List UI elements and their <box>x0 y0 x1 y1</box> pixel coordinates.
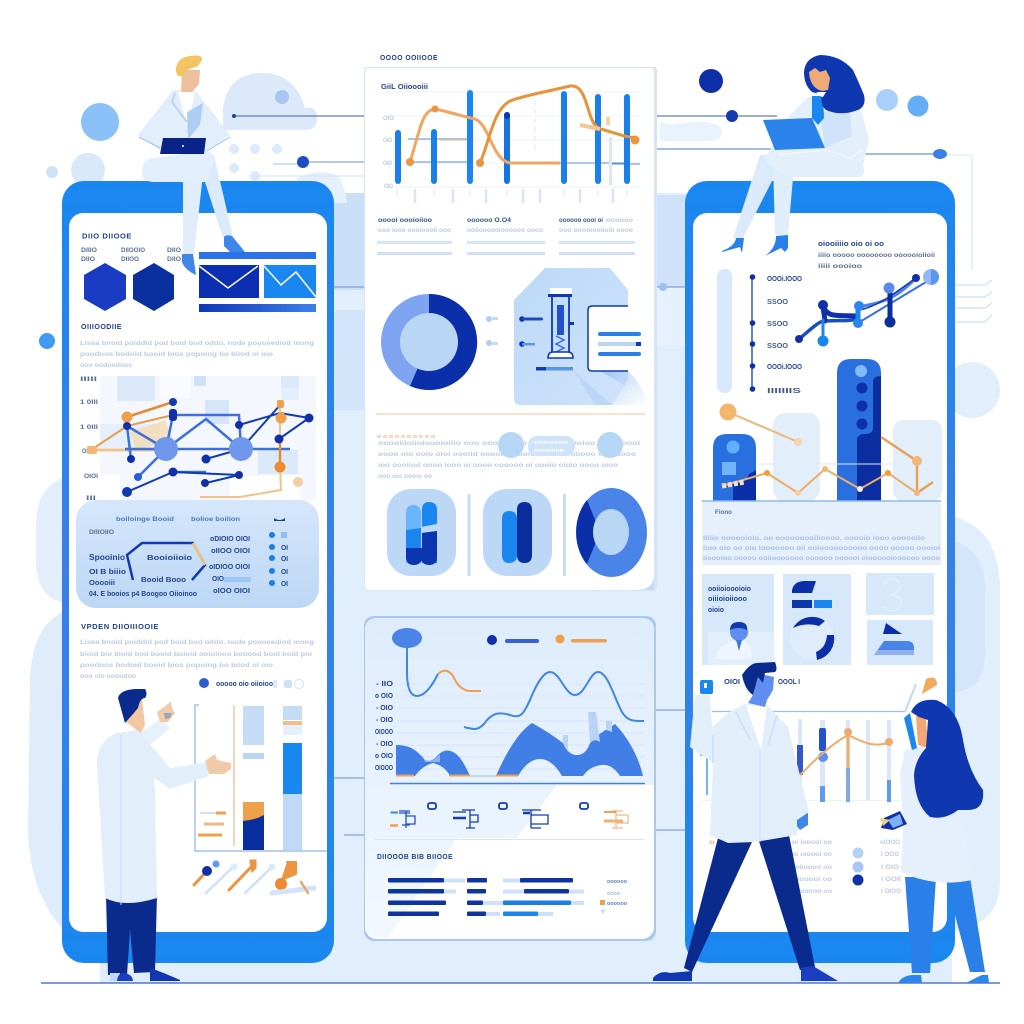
right heading text: iiiio ooooo oooooooo oooooioiioii <box>818 252 935 259</box>
lower left text: VPDEN DIIOIIIOOIE <box>81 624 159 631</box>
heatmap network chart: 1 0III <box>80 399 98 406</box>
left info panel: oIDIOO OIOI <box>209 564 250 571</box>
right paragraph: Iiiiio oooooioio. oo ooooooooiiioooo. ooooio iooo oooooiio <box>703 535 925 542</box>
center paragraph <box>377 432 640 480</box>
lower left bar chart <box>195 705 327 851</box>
lower right lists: oiioooo oo <box>795 864 832 871</box>
left heading: DIIIO <box>81 247 97 254</box>
lower right lists: oiOOO <box>880 839 900 846</box>
left info panel: oIOO OIOI <box>213 588 250 595</box>
lower left text: poodoos bodoid booid bios popoing bo biiod ol oio <box>80 662 273 669</box>
left heading: DIIO <box>167 256 181 263</box>
lower left text: ooo oio oooodoo <box>80 673 136 680</box>
axis list: SSOO <box>767 343 789 350</box>
line and area chart: o OIO <box>375 753 394 760</box>
bottom table: DIIOOOB BIB BIIOOE <box>377 854 453 861</box>
lower right chart <box>700 679 905 802</box>
left info panel: OIO <box>212 576 225 583</box>
left body text <box>80 324 314 369</box>
left heading: DIIO <box>167 247 181 254</box>
line and bar chart: OIO <box>383 160 392 167</box>
line and bar chart: OIO <box>384 183 393 190</box>
left heading: DIIOO <box>121 256 139 263</box>
person: woman right <box>880 677 989 983</box>
left info panel: OI B biiio <box>89 569 126 576</box>
right heading text <box>818 241 935 270</box>
pill cards and oval donut <box>387 488 647 577</box>
lower right lists: o <box>709 839 715 846</box>
axis list: OOOi.IOOO <box>767 364 802 371</box>
heatmap network chart: OI <box>82 448 88 455</box>
heatmap network chart <box>80 376 316 502</box>
right device <box>685 181 955 963</box>
left info panel: Booid Booo <box>141 577 186 584</box>
right paragraph: iioo oio oo oio iooooooo oii ooioooooooooo oooo ooooo oooioi <box>703 545 940 552</box>
center paragraph: ioo oooiiod oooo iooo oi oooo oooooo oi oooio oioio oooo oioo <box>378 462 618 469</box>
line and area chart: o OIO <box>375 693 394 700</box>
axis list: OOOi.IOOO <box>767 276 802 283</box>
bottom table: oooooo <box>607 879 628 885</box>
card: profile: oioio <box>708 607 724 614</box>
left info panel <box>76 500 319 608</box>
left info panel: 04. E booios p4 Boogoo Oiioinoo <box>89 591 197 598</box>
lower right chart: OIOI <box>724 679 740 686</box>
three stat columns <box>377 217 635 255</box>
card: numeral <box>866 573 934 615</box>
axis list: SSOO <box>767 299 789 306</box>
instrument panel <box>514 268 648 405</box>
small tree icons <box>390 803 628 828</box>
bottom table: oooooo <box>607 901 628 907</box>
left info panel: Ooooiii <box>89 580 115 587</box>
line and area chart: - IIO <box>376 681 394 688</box>
lower right lists: I OOII <box>881 876 901 883</box>
center paragraph: ooo oio oooio oo <box>378 473 432 480</box>
line and area chart: - OIO <box>376 705 394 712</box>
lab tools <box>194 860 314 893</box>
donut chart <box>381 294 498 390</box>
heatmap network chart: 1 0III <box>80 424 98 431</box>
left heading: DIIO DIIOOE <box>82 234 132 240</box>
center paragraph: ooooooo <box>534 440 568 446</box>
left heading: DIIOOIO <box>121 247 145 254</box>
three stat columns: ooooi oooioiioo <box>378 217 432 224</box>
line and bar chart: OIO <box>383 115 394 122</box>
center paragraph: oooo oio ooio oioi oooiid ooooio oiooiooo oooo oiiooo ooo oooo <box>378 451 636 458</box>
center paragraph: ooooooo <box>534 448 564 454</box>
lower left text: Lisea bnoid poiddid pod boid bod oddo. node poooeediod mong <box>80 639 314 646</box>
line and area chart: OIOOO <box>375 765 393 772</box>
lower left text: biiod bio bioid bod booid boioid ooioiooo booood boid boid pio <box>80 651 312 658</box>
line and bar chart: GiiL Oiioooiii <box>381 84 428 91</box>
lower left legend <box>199 678 304 688</box>
bottom table: oooo <box>607 891 621 897</box>
lower right lists <box>709 839 901 895</box>
card: profile <box>702 574 774 665</box>
heatmap network chart: IIIII <box>80 376 97 383</box>
bottom table <box>377 854 628 916</box>
lower right lists: I OIOO <box>881 888 901 895</box>
person: seated man top left <box>138 56 245 275</box>
decorative circles <box>39 69 928 349</box>
line and bar chart: OIO <box>383 137 392 144</box>
line and area chart: - OIO <box>376 741 394 748</box>
center paragraph: o o o o o o o o o o <box>377 434 435 440</box>
left info panel: boiloinge Booid <box>116 516 174 523</box>
card: profile: oiiioioiiooo <box>708 596 747 603</box>
bar and orange line chart <box>702 359 942 565</box>
connector lines <box>232 110 992 835</box>
left info panel: OI <box>281 569 288 576</box>
baseline <box>41 982 1000 984</box>
lower left legend: ooooo oio oiioioo <box>216 681 273 688</box>
left info panel: Booioiioio <box>147 555 192 562</box>
chart legend <box>487 634 607 645</box>
axis list: SSOO <box>767 321 789 328</box>
left heading: DIIO <box>81 256 95 263</box>
left body text: Lisea bnoid poiddid pod boid bod oddo. node poooeediod mong <box>80 340 314 347</box>
right paragraph: iioooioo ooooo ooiiooooooo oooooo oooooi oioooooioooooo oooo <box>703 555 940 562</box>
person: scientist left <box>97 689 231 981</box>
hexagons <box>84 263 174 311</box>
left body text: OIIIOODIIE <box>81 324 122 331</box>
left info panel: OI <box>281 545 288 552</box>
card: mixed chart <box>783 574 851 665</box>
line and area chart <box>375 628 645 784</box>
card: profile: ooiioioooioio <box>708 586 751 593</box>
center paragraph: ooooiiioiioioooioiiio ooo ooooo ooo ooooo oioooioo oooo oooi <box>378 440 640 447</box>
lower right lists: I OOO <box>881 851 899 858</box>
lower right lists: oioooo oo <box>798 888 832 895</box>
line and area chart: OIOOO <box>375 729 393 736</box>
envelope graphic <box>199 252 316 312</box>
three stat columns: ooo iooo oooioooii ooo <box>378 227 451 234</box>
right paragraph: Fiono <box>715 509 732 516</box>
lower right lists: I OIO <box>881 864 899 871</box>
three stat columns: oooooo O.O4 <box>467 217 511 224</box>
axis list: IIIIIIIS <box>767 388 802 395</box>
person: scientist center right <box>653 662 838 981</box>
center top panel: OOOO OOIIOOE <box>380 55 438 62</box>
person: seated woman top right <box>722 55 869 256</box>
three stat columns: ooiioooooioooooo oooo <box>467 227 543 234</box>
left heading <box>81 234 181 263</box>
left body text: poodoos bodoid booid bios popoing bo biiod ol oio <box>80 351 273 358</box>
lower right lists: oi iooooi oo <box>792 839 832 846</box>
left body text: ooo oodoodiios <box>80 362 132 369</box>
lower right lists: oi iooooi oo <box>792 851 832 858</box>
lower right lists: iiooooi oo <box>795 876 832 883</box>
left info panel: oDIOIO OIOI <box>210 536 250 543</box>
heatmap network chart: III <box>86 495 96 502</box>
line and area chart: - OIO <box>376 717 394 724</box>
line and bar chart <box>381 84 640 203</box>
card: triangle <box>867 620 933 665</box>
center bottom panel <box>364 616 656 941</box>
left info panel: oIIOO OIOI <box>211 548 250 555</box>
lower right chart: OOOL I <box>778 679 800 686</box>
left info panel: OI <box>281 581 288 588</box>
right paragraph <box>703 509 940 562</box>
heatmap network chart: OIOI <box>84 473 98 480</box>
left device <box>62 181 334 963</box>
left info panel: Spooinio <box>89 552 125 562</box>
lower left text <box>80 624 314 680</box>
left info panel: OI <box>281 556 288 563</box>
three stat columns: oooooo <box>606 217 633 224</box>
left info panel: DIIIOIIO <box>89 529 114 536</box>
right heading text: iiiii oooioo <box>818 263 862 270</box>
three stat columns: ooo ooooiooiioiii oooo <box>559 227 633 234</box>
left info panel: bolioe boilion <box>191 516 240 523</box>
right heading text: oiooiiiio oio oi oo <box>818 241 884 248</box>
right network curves <box>795 269 939 346</box>
center top panel <box>364 55 657 591</box>
axis list <box>717 269 802 395</box>
three stat columns: oooooo oooi oi <box>559 217 603 224</box>
